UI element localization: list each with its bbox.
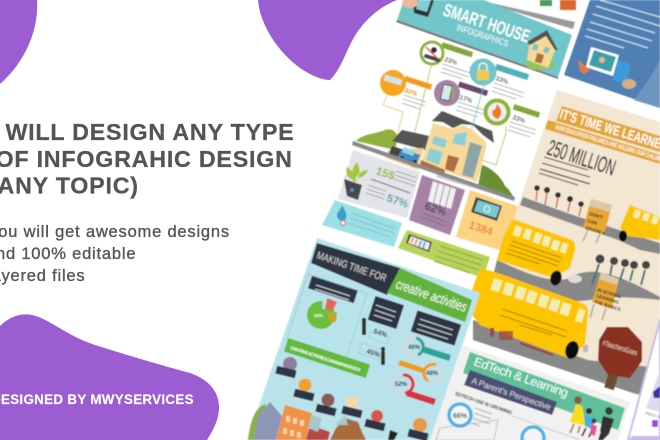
- callout: smart phone: 17%: [458, 94, 473, 105]
- chart: 54% ring: [522, 427, 544, 440]
- callout: smart phone: [434, 80, 488, 117]
- banner: subtitle: [545, 120, 660, 165]
- tile: green battery: [398, 230, 490, 278]
- chart: pie: 34%: [314, 313, 323, 318]
- panel: creative activities: [247, 238, 480, 440]
- illustration: buildings: [248, 402, 366, 440]
- icon: battery: [406, 234, 432, 252]
- text block: blue article: [585, 0, 660, 48]
- bus: front: [472, 268, 588, 360]
- kids: top row: [534, 185, 584, 216]
- sub text: [0, 223, 230, 285]
- tile: stats grey: [338, 150, 420, 218]
- headline: I WILL DESIGN ANY TYPE: [0, 119, 294, 145]
- sign: top: DON'T: [589, 211, 604, 220]
- banner: parent's perspective: A Parent's Perspective: [470, 375, 553, 412]
- callout: camera: [380, 70, 432, 140]
- road: middle: [492, 260, 660, 301]
- icons: activity tags: [275, 357, 429, 440]
- tile: cyan water: [322, 200, 402, 247]
- logos on road: [490, 328, 553, 355]
- heading: edtech use: EDTECH USE IS GROWING: [454, 391, 513, 416]
- stat: 62%: 62%: [423, 200, 448, 219]
- sign: lower: IN SCHOOL: [597, 287, 622, 299]
- stat: women and men: 54%: [372, 328, 389, 339]
- title: creative activities: [387, 268, 472, 322]
- icon: radiator: [428, 181, 456, 209]
- panel: purple chart: [628, 320, 660, 440]
- bus: middle: [497, 219, 582, 287]
- panel: edtech: [430, 345, 630, 440]
- icon: tablet and phone: [578, 47, 636, 89]
- title: making time for: MAKING TIME FOR: [315, 249, 388, 285]
- subtitle: infographics: INFOGRAPHICS: [455, 22, 510, 49]
- blob: top left: [0, 0, 37, 84]
- icon: phone and hand: [402, 0, 434, 17]
- chart: 66% ring: 66%: [453, 413, 468, 420]
- icon: monitor: [471, 197, 502, 221]
- title: smart house: SMART HOUSE: [441, 0, 533, 47]
- panel: top strip: [476, 0, 576, 29]
- stat: women and men: [359, 296, 404, 365]
- stop sign: [598, 327, 642, 390]
- tile: orange 1384: [456, 190, 520, 252]
- panel: blue article: [564, 0, 660, 108]
- stat: 57%: 57%: [385, 192, 410, 211]
- panel: school poster: [472, 90, 660, 402]
- panel: smart house infographic: [322, 40, 540, 278]
- callout: camera: 32%: [403, 87, 418, 98]
- icon: plant: [344, 162, 368, 200]
- sign: lower: [590, 272, 622, 320]
- sign: lower: LEARNING: [596, 293, 620, 305]
- hills: [356, 129, 398, 150]
- icon: small house: [525, 30, 558, 70]
- sign: lower: THE BASICS: [594, 299, 621, 312]
- sign: top: [583, 199, 612, 243]
- tile: purple 62%: [409, 175, 465, 235]
- panel: smart house header: [396, 0, 572, 79]
- text block: 250 million note: [539, 157, 590, 185]
- chart: pie: [287, 274, 367, 358]
- callout: lock: 33%: [494, 75, 509, 86]
- callout: fire: 33%: [511, 114, 526, 125]
- kids: lower row: [592, 254, 650, 285]
- stat: women and men: 45%: [365, 348, 382, 359]
- sign: top: GRADE 4: [585, 225, 606, 236]
- banner: edtech title: [463, 352, 625, 430]
- shelf line: [352, 141, 515, 201]
- banner: activities: [284, 338, 370, 378]
- title: creative activities: creative activities: [394, 276, 469, 315]
- stat: rings: [392, 310, 461, 405]
- sign: top: CAN: [587, 218, 597, 226]
- infographic collage: [247, 0, 660, 440]
- stat: 15$: 15$: [374, 165, 397, 183]
- banner: activities: CREATIVE ACTIVITIES CANADIANS ENJOY: [290, 345, 362, 373]
- icon: water drop: [337, 205, 346, 221]
- callout: security: 23%: [443, 56, 458, 67]
- blob: bottom left: [0, 314, 219, 440]
- chart: 66% ring: [449, 404, 471, 426]
- road: bottom: [473, 320, 660, 400]
- stat: rings: 48%: [426, 371, 439, 377]
- callout: security: [411, 40, 473, 148]
- headline: [0, 119, 294, 198]
- stat: rings: 46%: [408, 345, 421, 351]
- icon: car: [398, 147, 419, 164]
- illustration: house: [386, 111, 508, 196]
- stat: rings: 52%: [395, 382, 408, 388]
- stop sign: #TeachersGoes: [601, 338, 639, 357]
- bus: top right: [619, 205, 660, 242]
- banner: edtech title: EdTech & Learning: [472, 355, 571, 400]
- callout: lock: [470, 58, 529, 135]
- icon: family: [570, 396, 614, 440]
- blob: top centre: [258, 0, 397, 80]
- road: top: [520, 197, 660, 254]
- callout: fire: [470, 98, 540, 165]
- stat: 1384: 1384: [467, 219, 495, 239]
